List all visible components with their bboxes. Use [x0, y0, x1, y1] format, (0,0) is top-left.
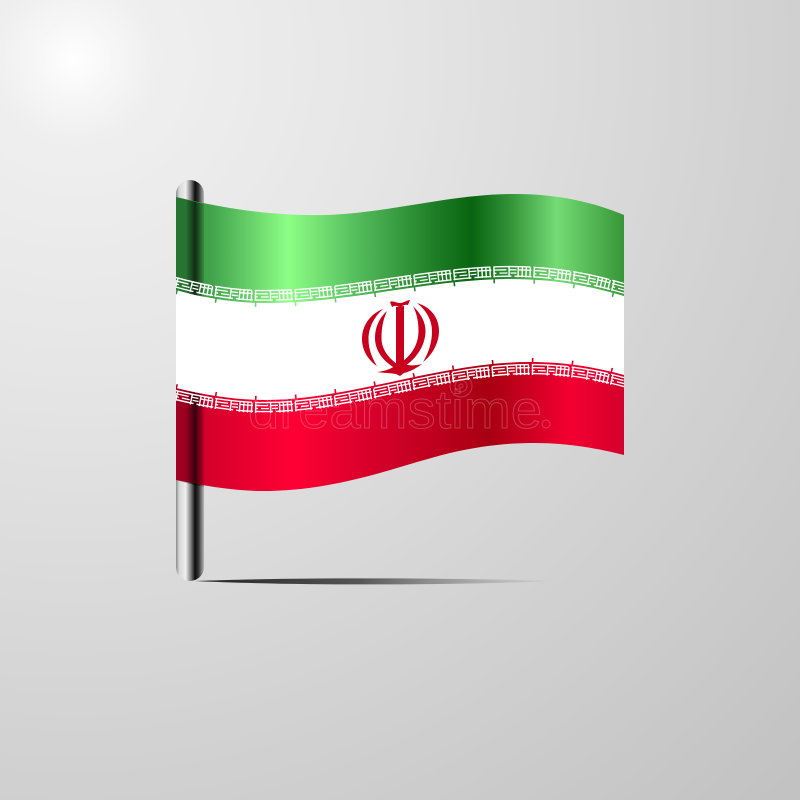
green stripe — [176, 194, 624, 303]
watermark text: dreamstime — [248, 380, 542, 440]
pole seen through red stripe — [176, 388, 204, 487]
emblem of Iran — [362, 300, 439, 376]
kufic border: green stripe — [176, 267, 624, 304]
white stripe — [176, 270, 624, 420]
pole shadow — [195, 578, 560, 584]
watermark registered mark — [542, 420, 550, 428]
kufic border: red stripe — [176, 360, 624, 412]
red stripe — [176, 362, 624, 491]
watermark — [248, 375, 550, 440]
flag pole — [176, 180, 204, 581]
pole seen through green stripe — [176, 197, 204, 297]
background glow — [0, 0, 155, 140]
watermark spiral — [450, 375, 472, 397]
flag — [176, 194, 624, 491]
